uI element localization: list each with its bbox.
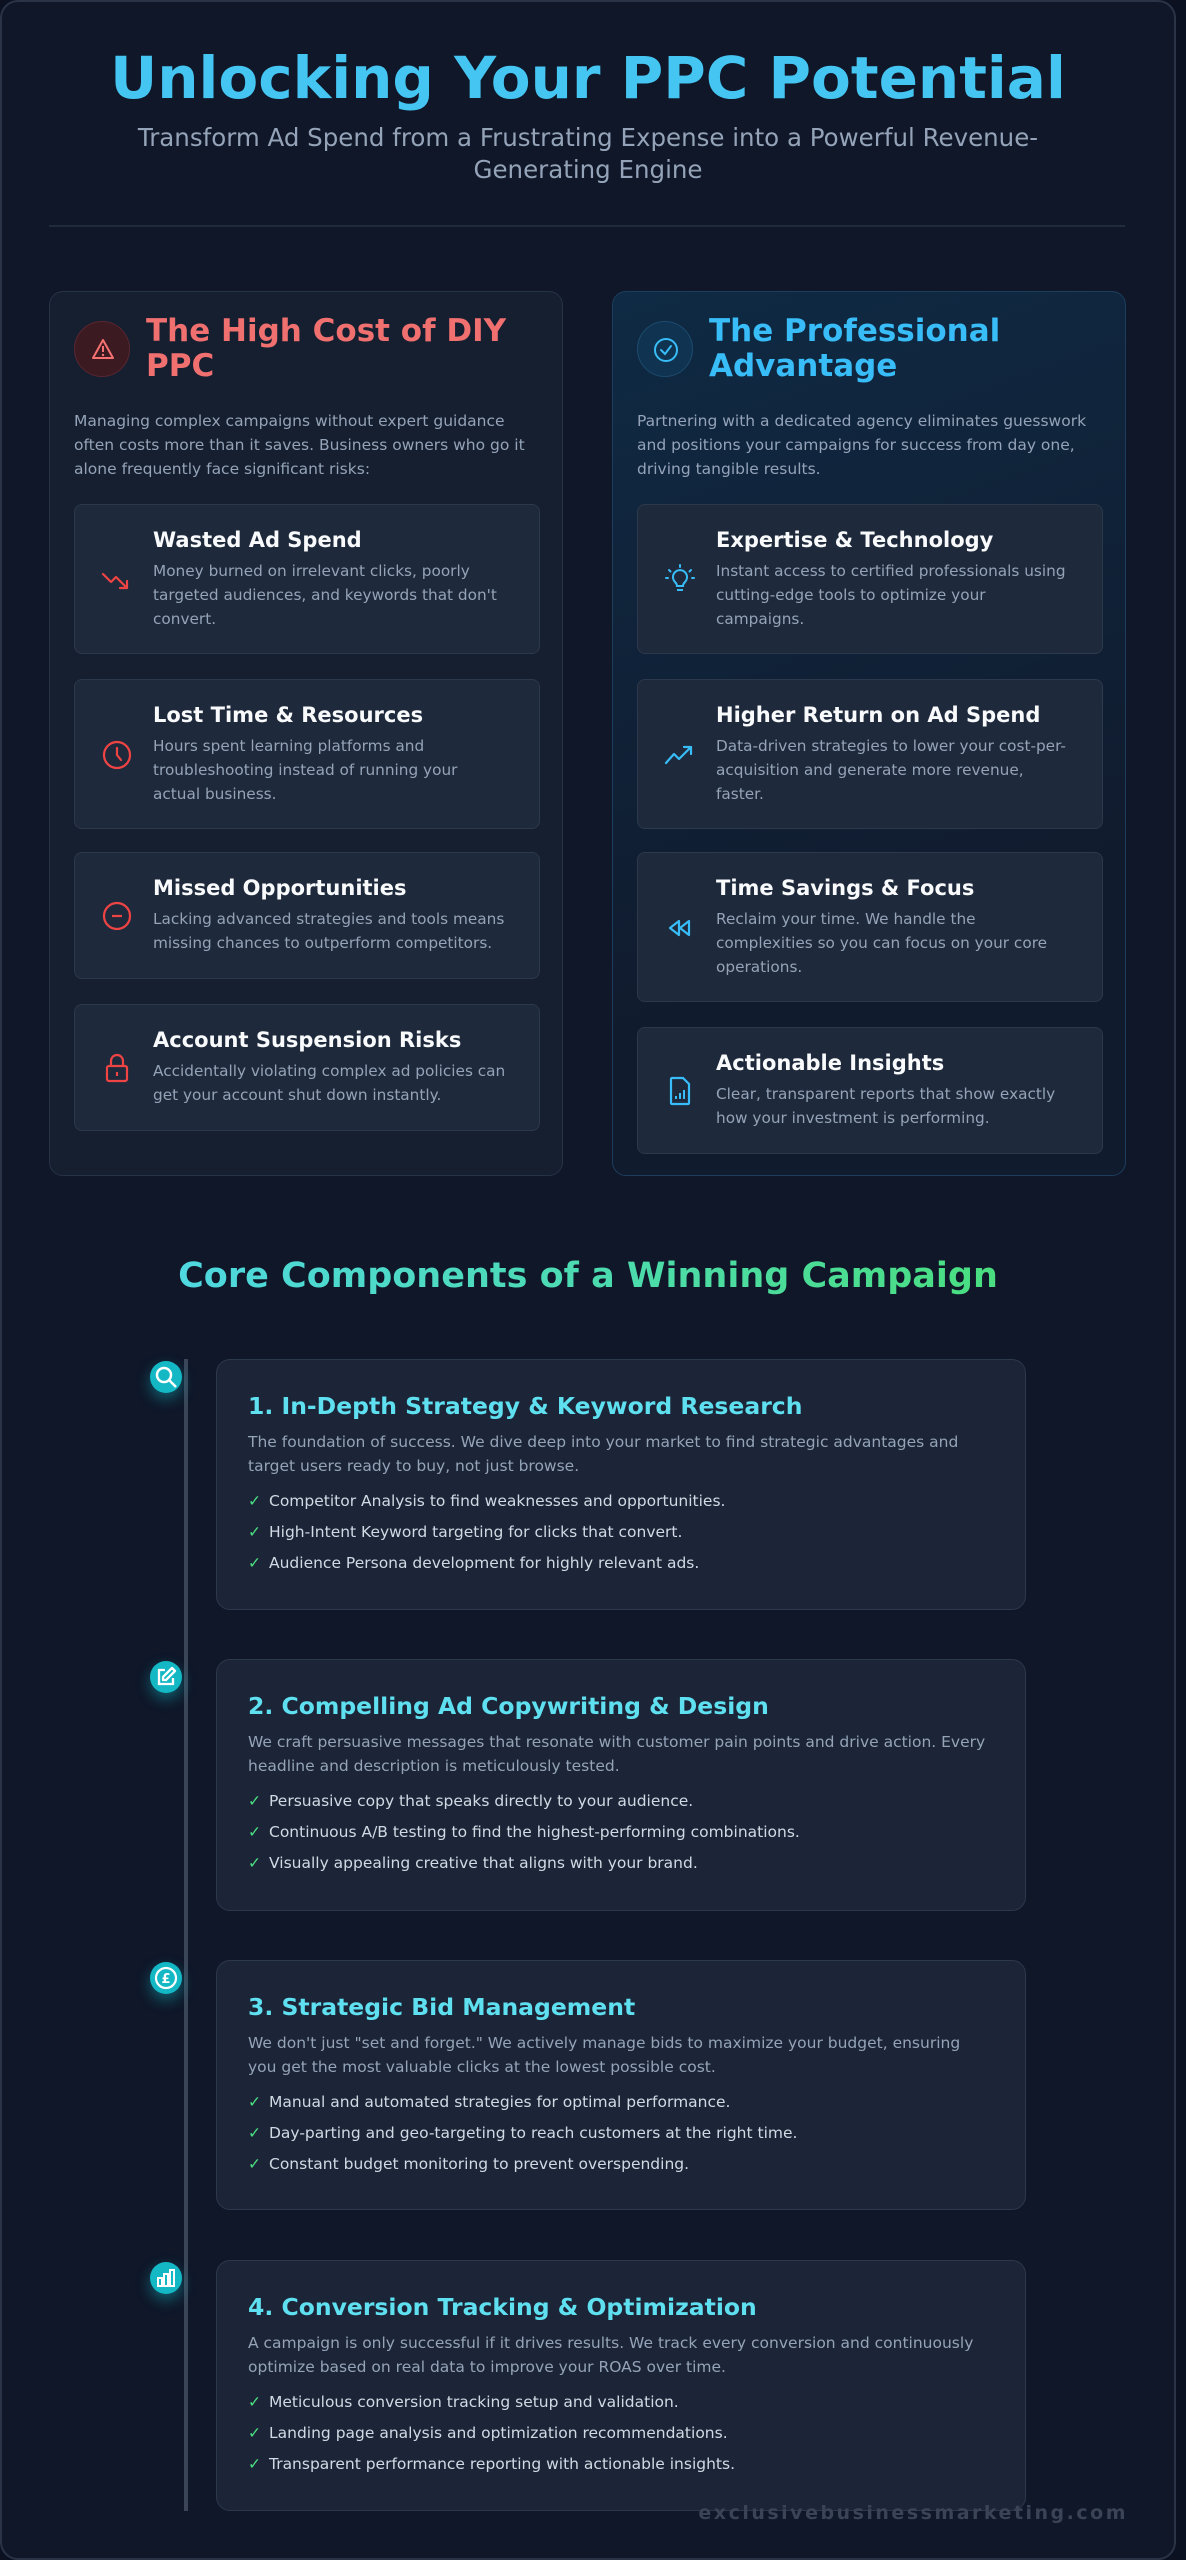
card: higher return: Higher Return on Ad Spend bbox=[716, 703, 1040, 727]
card: time savings bbox=[637, 852, 1103, 1002]
timeline card 1: The foundation of success. We dive deep into your market to find strategic advantages and bbox=[248, 1433, 958, 1451]
card: actionable insights: Actionable Insights bbox=[716, 1051, 944, 1075]
card: missed opportunities bbox=[74, 852, 540, 979]
timeline card 2: ✓ Visually appealing creative that aligns with your brand. bbox=[248, 1854, 698, 1872]
timeline card 4: optimize based on real data to improve your ROAS over time. bbox=[248, 2358, 726, 2376]
card: wasted ad spend bbox=[74, 504, 540, 654]
card: actionable insights: how your investment is performing. bbox=[716, 1109, 990, 1127]
card: time savings: Reclaim your time. We handle the bbox=[716, 910, 976, 928]
timeline card 1: target users ready to buy, not just browse. bbox=[248, 1457, 579, 1475]
timeline card 4: A campaign is only successful if it drives results. We track every conversion and continuously bbox=[248, 2334, 973, 2352]
timeline card 4: ✓ Landing page analysis and optimization recommendations. bbox=[248, 2424, 728, 2442]
icon: rewind bbox=[668, 920, 690, 936]
card: higher return bbox=[637, 679, 1103, 829]
card: higher return: Data-driven strategies to lower your cost-per- bbox=[716, 737, 1066, 755]
timeline card 1: ✓ Competitor Analysis to find weaknesses and opportunities. bbox=[248, 1492, 725, 1510]
timeline card 3 bbox=[216, 1960, 1026, 2210]
timeline card 2: ✓ Persuasive copy that speaks directly to your audience. bbox=[248, 1792, 693, 1810]
title: Unlocking Your PPC Potential bbox=[110, 44, 1066, 112]
timeline node: pound: £ bbox=[161, 1972, 171, 1987]
timeline card 1: 1. In-Depth Strategy & Keyword Research bbox=[248, 1392, 802, 1420]
card: expertise: cutting-edge tools to optimize your bbox=[716, 586, 986, 604]
card: lost time: troubleshooting instead of running your bbox=[153, 761, 457, 779]
intro text: Managing complex campaigns without expert guidance often costs more than it saves. Business owners who go it alone frequently face significant risks: bbox=[74, 412, 525, 478]
timeline card 1 bbox=[216, 1359, 1026, 1610]
card: lost time bbox=[74, 679, 540, 829]
timeline card 1: ✓ Audience Persona development for highly relevant ads. bbox=[248, 1554, 699, 1572]
icon: check circle bbox=[637, 321, 693, 377]
card: time savings: operations. bbox=[716, 958, 802, 976]
card: actionable insights: Clear, transparent reports that show exactly bbox=[716, 1085, 1055, 1103]
timeline card 4: ✓ Meticulous conversion tracking setup and validation. bbox=[248, 2393, 679, 2411]
timeline card 4: 4. Conversion Tracking & Optimization bbox=[248, 2293, 757, 2321]
card: suspension risks: get your account shut down instantly. bbox=[153, 1086, 441, 1104]
card: higher return: faster. bbox=[716, 785, 764, 803]
card: lost time: actual business. bbox=[153, 785, 276, 803]
timeline card 2: headline and description is meticulously tested. bbox=[248, 1757, 620, 1775]
section heading: Core Components of a Winning Campaign bbox=[178, 1256, 998, 1296]
card: expertise: Expertise & Technology bbox=[716, 528, 993, 552]
card: expertise bbox=[637, 504, 1103, 654]
card: wasted ad spend: targeted audiences, and keywords that don't bbox=[153, 586, 497, 604]
icon: minus circle bbox=[102, 902, 132, 930]
icon: lightbulb bbox=[665, 564, 695, 591]
card: actionable insights bbox=[637, 1027, 1103, 1154]
card: expertise: Instant access to certified professionals using bbox=[716, 562, 1066, 580]
card: missed opportunities: Lacking advanced strategies and tools means bbox=[153, 910, 504, 928]
timeline card 2: 2. Compelling Ad Copywriting & Design bbox=[248, 1692, 769, 1720]
timeline card 3: ✓ Manual and automated strategies for optimal performance. bbox=[248, 2093, 730, 2111]
icon: lock bbox=[106, 1054, 128, 1082]
icon: clock bbox=[102, 740, 132, 770]
timeline node: chart bbox=[150, 2262, 182, 2294]
timeline card 2 bbox=[216, 1659, 1026, 1911]
subtitle: Transform Ad Spend from a Frustrating Expense into a Powerful Revenue-Generating Engine bbox=[138, 123, 1038, 184]
card: time savings: complexities so you can focus on your core bbox=[716, 934, 1047, 952]
card: wasted ad spend: convert. bbox=[153, 610, 216, 628]
timeline card 3: 3. Strategic Bid Management bbox=[248, 1993, 635, 2021]
card: time savings: Time Savings & Focus bbox=[716, 876, 974, 900]
card: expertise: campaigns. bbox=[716, 610, 804, 628]
icon: trend down bbox=[102, 572, 128, 590]
timeline card 4: ✓ Transparent performance reporting with actionable insights. bbox=[248, 2455, 735, 2473]
intro text: Partnering with a dedicated agency eliminates guesswork and positions your campaigns for success from day one, driving tangible results. bbox=[637, 412, 1086, 478]
card: higher return: acquisition and generate more revenue, bbox=[716, 761, 1024, 779]
timeline card 3: ✓ Constant budget monitoring to prevent overspending. bbox=[248, 2155, 689, 2173]
panel: professional advantage bbox=[612, 291, 1126, 1176]
heading: The High Cost of DIY PPC bbox=[146, 313, 506, 384]
timeline card 3: We don't just "set and forget." We actively manage bids to maximize your budget, ensuring bbox=[248, 2034, 960, 2052]
timeline card 3: ✓ Day-parting and geo-targeting to reach customers at the right time. bbox=[248, 2124, 797, 2142]
icon: warning bbox=[74, 321, 130, 377]
timeline node: pound bbox=[150, 1962, 182, 1994]
card: missed opportunities: missing chances to outperform competitors. bbox=[153, 934, 492, 952]
card: suspension risks bbox=[74, 1004, 540, 1131]
card: wasted ad spend: Money burned on irrelevant clicks, poorly bbox=[153, 562, 470, 580]
heading: The Professional Advantage bbox=[709, 313, 1000, 384]
timeline node: edit bbox=[150, 1661, 182, 1693]
icon: trend up bbox=[664, 746, 692, 764]
timeline card 3: you get the most valuable clicks at the lowest possible cost. bbox=[248, 2058, 716, 2076]
footer watermark: exclusivebusinessmarketing.com bbox=[698, 2502, 1128, 2524]
card: lost time: Hours spent learning platforms and bbox=[153, 737, 424, 755]
timeline node: search bbox=[150, 1361, 182, 1393]
card: lost time: Lost Time & Resources bbox=[153, 703, 423, 727]
timeline card 4 bbox=[216, 2260, 1026, 2511]
timeline card 2: ✓ Continuous A/B testing to find the highest-performing combinations. bbox=[248, 1823, 800, 1841]
card: suspension risks: Accidentally violating complex ad policies can bbox=[153, 1062, 505, 1080]
timeline card 1: ✓ High-Intent Keyword targeting for clicks that convert. bbox=[248, 1523, 682, 1541]
timeline card 2: We craft persuasive messages that resonate with customer pain points and drive action. Every bbox=[248, 1733, 985, 1751]
card: wasted ad spend: Wasted Ad Spend bbox=[153, 528, 362, 552]
icon: report bbox=[670, 1076, 690, 1106]
panel: high cost of DIY bbox=[49, 291, 563, 1176]
card: missed opportunities: Missed Opportunities bbox=[153, 876, 406, 900]
card: suspension risks: Account Suspension Risks bbox=[153, 1028, 461, 1052]
